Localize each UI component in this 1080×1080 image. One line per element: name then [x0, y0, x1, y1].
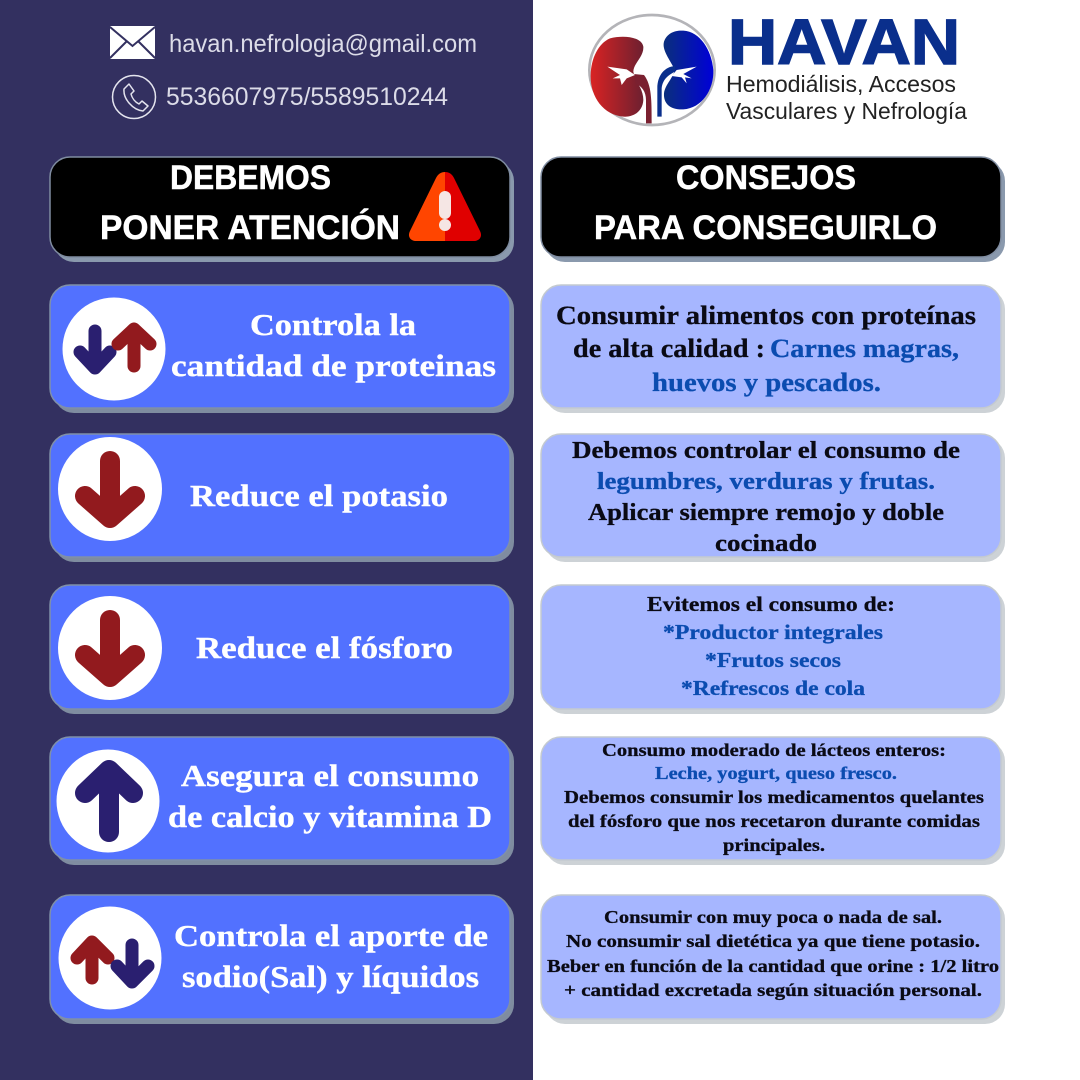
- panel title: Controla el aporte de: [174, 918, 488, 953]
- advice text: [572, 438, 960, 557]
- panel title: Reduce el potasio: [190, 478, 448, 513]
- panel title: sodio(Sal) y líquidos: [182, 959, 479, 994]
- logo: [589, 6, 967, 125]
- panel title: cantidad de proteinas: [171, 348, 496, 383]
- advice text: [556, 301, 976, 397]
- advice text: Aplicar siempre remojo y doble: [588, 500, 944, 526]
- logo tagline: Hemodiálisis, Accesos: [726, 71, 956, 97]
- advice text: Evitemos el consumo de:: [647, 592, 895, 616]
- logo tagline: [726, 71, 967, 124]
- advice text: *Refrescos de cola: [681, 676, 866, 700]
- logo tagline: Vasculares y Nefrología: [726, 98, 967, 124]
- panel: phosphorus advice: [541, 585, 1005, 714]
- advice text: del fósforo que nos recetaron durante comidas: [568, 811, 980, 831]
- panel title: Reduce el fósforo: [196, 630, 453, 665]
- advice text: Debemos controlar el consumo de: [572, 438, 960, 464]
- heading: consejos para conseguirlo: [541, 157, 1005, 262]
- logo wordmark: HAVAN: [728, 6, 960, 78]
- advice text: *Productor integrales: [663, 620, 883, 644]
- heading: debemos poner atención: [50, 157, 514, 262]
- left background panel: [0, 0, 533, 1080]
- heading: consejos para conseguirlo: CONSEJOS: [676, 159, 856, 197]
- advice text: Leche, yogurt, queso fresco.: [655, 763, 897, 783]
- advice text: Consumo moderado de lácteos enteros:: [602, 740, 946, 760]
- icon: kidneys: [589, 15, 715, 125]
- advice text: [547, 907, 999, 1000]
- panel: protein advice: [541, 285, 1005, 413]
- panel: potassium advice: [541, 434, 1005, 562]
- phone numbers: 5536607975/5589510244: [166, 83, 448, 111]
- panel title: Controla la: [250, 307, 417, 342]
- heading: debemos poner atención: PONER ATENCIÓN: [100, 209, 400, 247]
- icon: down and up arrows: [62, 298, 166, 400]
- panel: calcium advice: [541, 737, 1005, 865]
- icon: up and down arrows: [58, 906, 162, 1010]
- advice text: Carnes magras,: [770, 334, 959, 363]
- panel: calcium and vitamin D: [50, 737, 514, 865]
- advice text: legumbres, verduras y frutas.: [597, 469, 935, 495]
- icon: phone: [112, 76, 156, 118]
- advice text: No consumir sal dietética ya que tiene potasio.: [566, 931, 980, 951]
- advice text: [564, 740, 984, 855]
- icon: down arrow: [58, 596, 162, 700]
- icon: up arrow: [56, 750, 160, 852]
- advice text: + cantidad excretada según situación personal.: [564, 980, 982, 1000]
- advice text: de alta calidad :: [573, 334, 765, 363]
- advice text: Consumir alimentos con proteínas: [556, 301, 976, 330]
- panel: reduce phosphorus: [50, 585, 514, 714]
- panel: control protein: [50, 285, 514, 413]
- icon: warning triangle: [409, 172, 481, 241]
- advice text: *Frutos secos: [705, 648, 841, 672]
- panel title: [168, 758, 492, 834]
- panel title: [171, 307, 496, 383]
- advice text: [647, 592, 895, 700]
- advice text: huevos y pescados.: [652, 368, 881, 397]
- advice text: cocinado: [715, 531, 817, 557]
- icon: down arrow: [58, 437, 162, 541]
- panel title: Asegura el consumo: [181, 758, 479, 793]
- advice text: Beber en función de la cantidad que orine : 1/2 litro: [547, 956, 999, 976]
- icon: envelope: [110, 26, 155, 59]
- advice text: Debemos consumir los medicamentos quelantes: [564, 787, 984, 807]
- panel title: de calcio y vitamina D: [168, 799, 492, 834]
- panel: reduce potassium: [50, 434, 514, 562]
- panel: sodium and liquids: [50, 895, 514, 1024]
- advice text: Consumir con muy poca o nada de sal.: [604, 907, 942, 927]
- panel: sodium advice: [541, 895, 1005, 1024]
- advice text: principales.: [723, 835, 825, 855]
- contact block: [110, 26, 477, 118]
- heading: debemos poner atención: DEBEMOS: [170, 159, 331, 197]
- heading: consejos para conseguirlo: PARA CONSEGUIRLO: [594, 209, 937, 247]
- email address: havan.nefrologia@gmail.com: [169, 30, 477, 58]
- panel title: [174, 918, 488, 994]
